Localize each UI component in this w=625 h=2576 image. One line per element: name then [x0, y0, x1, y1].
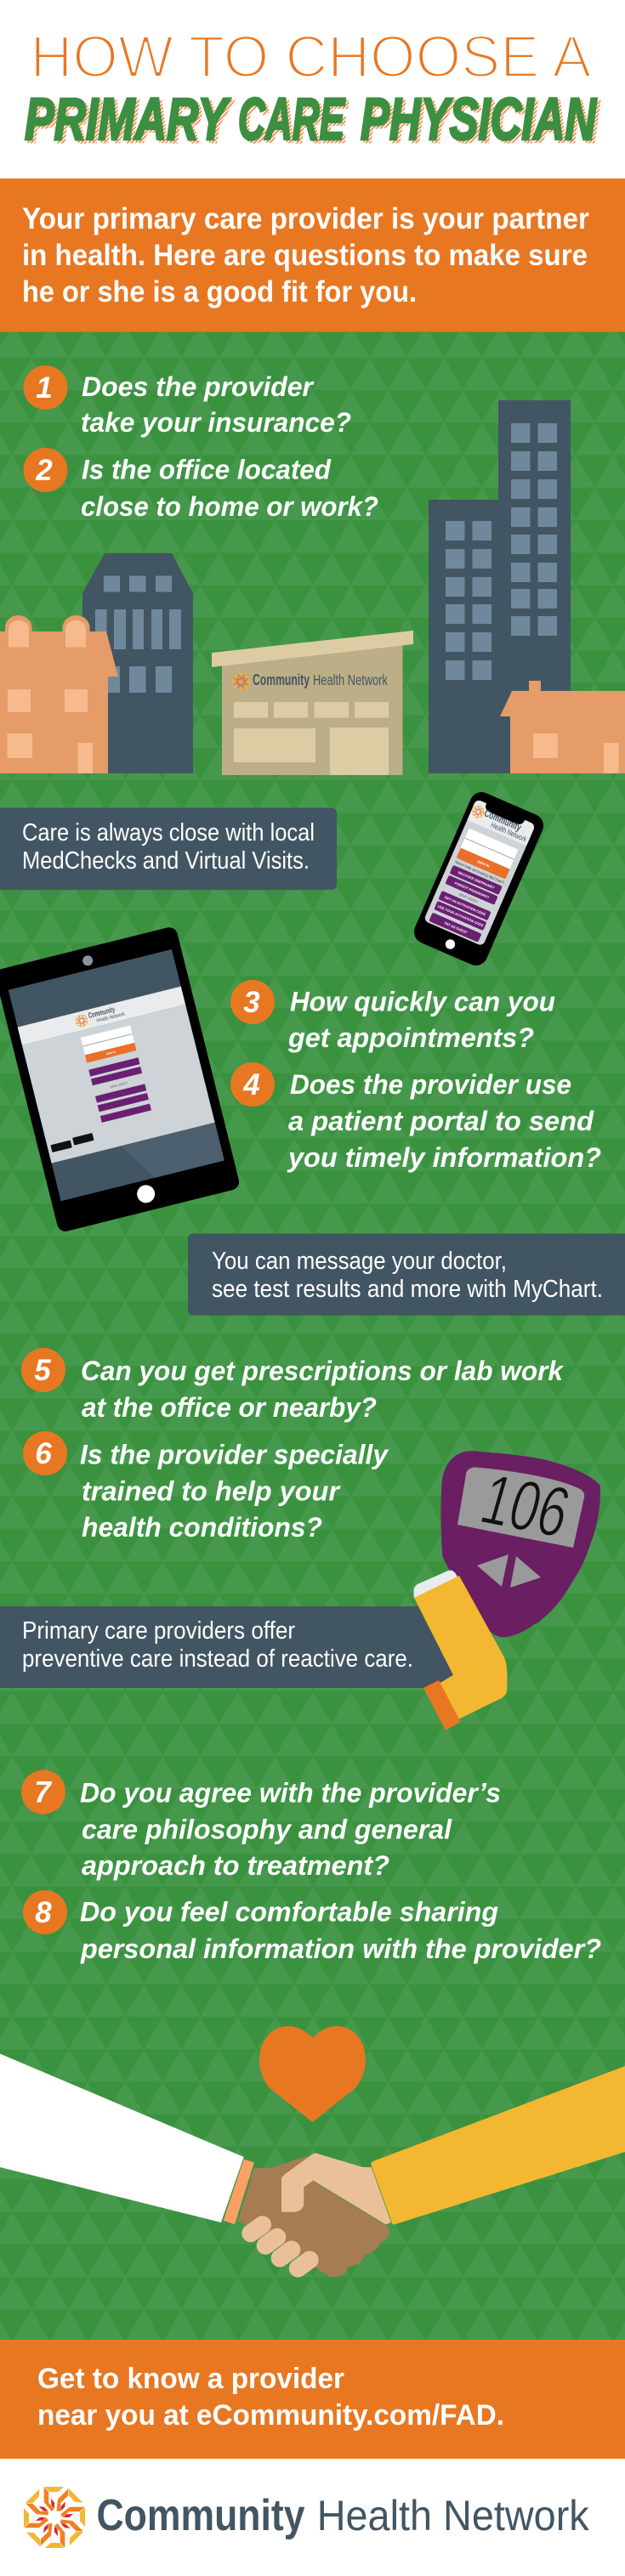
panel: call to action: Get to know a provider: [37, 2363, 344, 2395]
question 1: [24, 365, 351, 438]
question 6: trained to help your: [82, 1476, 341, 1507]
callout: MyChart: You can message your doctor,: [212, 1248, 507, 1275]
question 7: care philosophy and general: [82, 1814, 452, 1844]
icon: glucose meter: 106: [473, 1459, 578, 1552]
question 1: Does the provider: [82, 371, 315, 402]
clinic building: Health Network: [313, 671, 388, 688]
panel: intro: [0, 178, 625, 332]
icon: smartphone with portal: SIGN IN: [477, 859, 490, 869]
icon: smartphone with portal: NEW USER?: [458, 892, 480, 904]
yellow sleeve: [371, 2066, 625, 2224]
left house: [0, 615, 118, 773]
question 8: Do you feel comfortable sharing: [80, 1897, 498, 1928]
brown hand: [238, 2156, 389, 2277]
question 4: 4: [242, 1068, 260, 1101]
logo icon: [24, 2487, 85, 2548]
question 4: [230, 1062, 601, 1173]
question 3: get appointments?: [287, 1022, 534, 1053]
question 5: at the office or nearby?: [82, 1392, 377, 1423]
illustration: handshake: [0, 2053, 625, 2281]
question 4: Does the provider use: [290, 1069, 571, 1100]
title line 2 shadow: PRIMARY: [27, 88, 233, 155]
question 6: health conditions?: [82, 1512, 322, 1543]
callout: preventive care: Primary care providers offer: [22, 1617, 295, 1645]
tall office tower: [429, 400, 571, 773]
callout: MedChecks: Care is always close with local: [22, 819, 315, 846]
question 8: 8: [35, 1896, 52, 1929]
light hand: [281, 2154, 391, 2224]
panel: intro: in health. Here are questions to make sure: [22, 238, 588, 272]
question 1: take your insurance?: [81, 407, 351, 438]
question 8: [23, 1890, 601, 1964]
clinic building: Community: [253, 671, 310, 688]
logo wordmark: [97, 2491, 590, 2540]
question 4: a patient portal to send: [288, 1106, 594, 1136]
logo wordmark: Community: [97, 2491, 305, 2540]
question 7: [21, 1770, 501, 1881]
callout: preventive care: [0, 1606, 453, 1688]
orange cuff: [224, 2160, 254, 2224]
panel: intro: Your primary care provider is your partner: [22, 201, 589, 235]
panel: green patterned background: [0, 331, 625, 2341]
dark building: [82, 553, 193, 773]
question 2: Is the office located: [82, 454, 332, 484]
icon: smartphone with portal: USE YOUR ACTIVATION CODE: [437, 904, 485, 928]
white sleeve: [0, 2053, 244, 2222]
question 2: 2: [35, 454, 53, 487]
title: [25, 24, 600, 155]
illustration: city buildings: [0, 400, 625, 775]
panel: intro: he or she is a good fit for you.: [22, 275, 417, 309]
title line 1: HOW TO CHOOSE A: [31, 24, 592, 90]
right house: [500, 681, 625, 773]
question 6: 6: [35, 1437, 52, 1470]
question 5: [21, 1348, 565, 1423]
title line 2 shadow: [27, 88, 600, 155]
icon: tablet with portal: Community: [88, 1005, 116, 1020]
question 5: 5: [34, 1354, 51, 1387]
icon: smartphone with portal: GET AN ACTIVATION CODE: [444, 895, 486, 917]
callout: MedChecks: [0, 807, 337, 890]
title line 2: CARE: [238, 86, 345, 152]
callout: MedChecks: MedChecks and Virtual Visits.: [22, 847, 310, 875]
icon: tablet with portal: SIGN IN: [105, 1050, 116, 1056]
question 7: Do you agree with the provider’s: [80, 1778, 501, 1809]
logo: Community Health Network: [24, 2487, 590, 2548]
question 1: 1: [36, 371, 53, 405]
callout: preventive care: preventive care instead of reactive care.: [22, 1645, 413, 1673]
icon: smartphone with portal: Need help accessing MyChart?: [454, 860, 505, 885]
icon: tablet with portal: [0, 926, 241, 1233]
title line 2: [25, 86, 597, 152]
title line 2 shadow: CARE: [241, 88, 349, 155]
question 2: [24, 448, 378, 522]
icon: tablet with portal: Health Network: [96, 1011, 126, 1024]
icon: smartphone with portal: RECOVER USERNAME?: [457, 870, 496, 890]
icon: inhaler: [414, 1571, 507, 1730]
title line 2: PRIMARY: [25, 86, 230, 152]
clinic building: [212, 631, 413, 775]
icon: smartphone with portal: Health Network: [490, 820, 528, 844]
icon: smartphone with portal: Community: [482, 807, 523, 834]
icon: smartphone with portal: [411, 789, 547, 969]
question 3: How quickly can you: [290, 986, 555, 1016]
callout: MyChart: [188, 1234, 625, 1316]
icon: smartphone with portal: FORGOT PASSWORD?: [454, 880, 491, 900]
question 5: Can you get prescriptions or lab work: [81, 1356, 565, 1386]
icon: heart: [259, 2026, 366, 2122]
question 4: you timely information?: [287, 1142, 601, 1173]
icon: glucose meter: [440, 1451, 600, 1637]
question 7: 7: [34, 1776, 52, 1809]
icon: tablet with portal: NEW USER?: [110, 1081, 128, 1089]
question 2: close to home or work?: [81, 491, 378, 522]
question 6: [23, 1431, 389, 1543]
panel: call to action: [0, 2340, 625, 2459]
question 3: 3: [243, 986, 260, 1019]
question 7: approach to treatment?: [82, 1850, 389, 1881]
fingers: [238, 2212, 322, 2281]
question 3: [230, 980, 555, 1053]
question 8: personal information with the provider?: [80, 1933, 601, 1964]
icon: smartphone with portal: TRY AS GUEST: [443, 920, 469, 935]
question 6: Is the provider specially: [80, 1440, 389, 1470]
logo wordmark: Health Network: [317, 2492, 590, 2539]
panel: call to action: near you at eCommunity.com/FAD.: [37, 2399, 504, 2432]
